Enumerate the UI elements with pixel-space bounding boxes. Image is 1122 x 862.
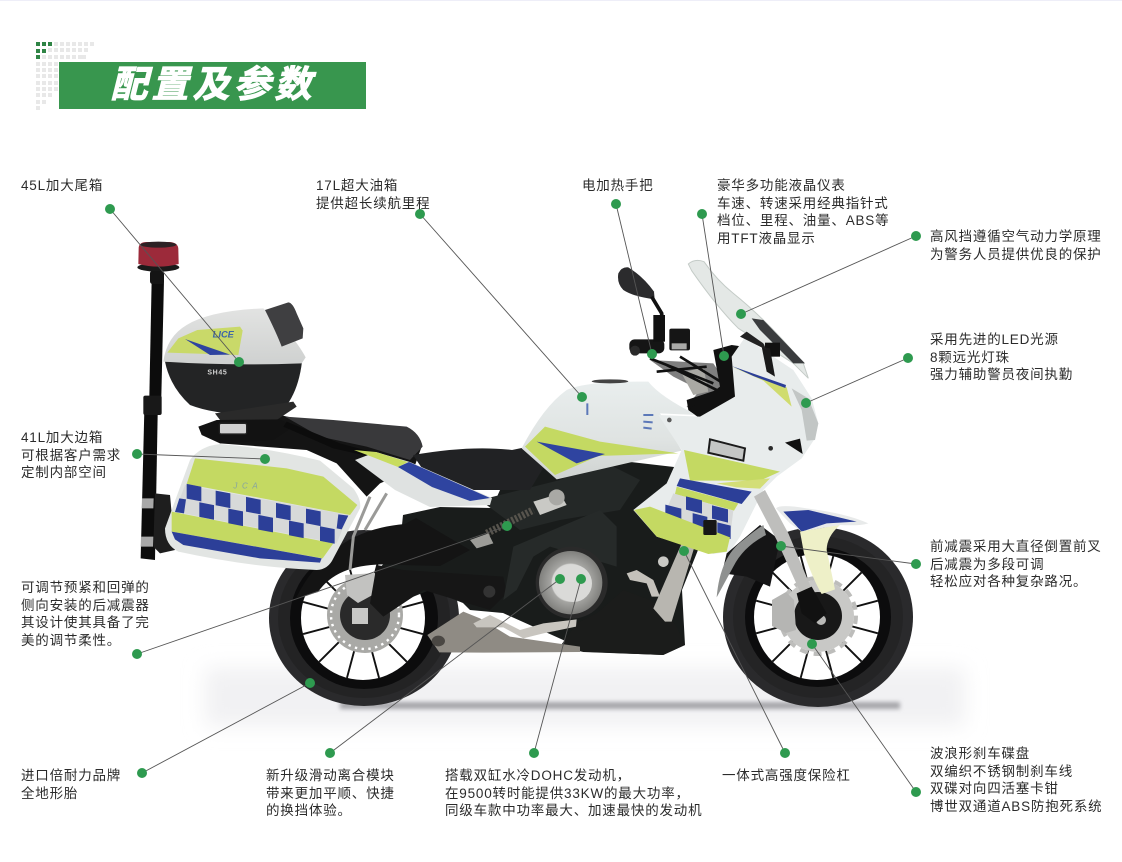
text: LED light: 强力辅助警员夜间执勤: [930, 367, 1073, 382]
rear light bracket: [198, 419, 293, 443]
leader: LED light: [801, 353, 913, 408]
leader: crash bar: [679, 546, 790, 758]
text: slipper clutch: 新升级滑动离合模块: [266, 768, 395, 783]
text: engine: 同级车款中功率最大、加速最快的发动机: [445, 803, 702, 818]
tail unit: [163, 302, 423, 570]
text: slipper clutch: 的换挡体验。: [266, 803, 352, 818]
engine, exhaust and swingarm: [370, 489, 695, 655]
text: windscreen: 高风挡遵循空气动力学原理: [930, 229, 1102, 244]
text: brake system: 波浪形刹车碟盘: [930, 746, 1030, 761]
fairing dark mount: [688, 345, 743, 418]
motorcycle illustration: [137, 242, 913, 707]
red beacon: [137, 242, 179, 284]
text: 45L top box: 45L加大尾箱: [21, 178, 103, 193]
rider seat: [413, 440, 560, 490]
top box: SH45: [207, 370, 227, 377]
text: crash bar: 一体式高强度保险杠: [722, 768, 851, 783]
engine cover: [536, 547, 608, 619]
leader: 41L side case: [132, 449, 270, 464]
leader: rear shock: [132, 521, 512, 659]
text: front fork: 轻松应对各种复杂路况。: [930, 574, 1087, 589]
title banner: [59, 62, 366, 109]
text: 41L side case: 可根据客户需求: [21, 448, 121, 463]
decorative dot pattern: [36, 42, 94, 110]
mirror: [618, 267, 663, 330]
leader: engine: [529, 574, 586, 758]
tank: [522, 382, 697, 479]
text: rear shock: 可调节预紧和回弹的: [21, 580, 150, 595]
leader: slipper clutch: [325, 574, 565, 758]
text: slipper clutch: 带来更加平顺、快捷: [266, 786, 395, 801]
title banner: 配置及参数: [109, 64, 324, 105]
front fork and fender: [703, 490, 868, 623]
exhaust: [427, 612, 580, 653]
text: LED light: 采用先进的LED光源: [930, 332, 1059, 347]
text: brake system: [930, 746, 1102, 814]
front footrest bracket: [627, 570, 660, 597]
leader lines with dots: [105, 199, 921, 797]
text: rear shock: 其设计使其具备了完: [21, 615, 150, 630]
text: 41L side case: 定制内部空间: [21, 465, 107, 480]
leader: heated grips: [611, 199, 657, 359]
text: engine: 在9500转时能提供33KW的最大功率，: [445, 786, 690, 801]
camera mount: [740, 332, 780, 377]
leader: front fork: [776, 541, 921, 569]
text: brake system: 双编织不锈钢制刹车线: [930, 764, 1073, 779]
text: rear shock: [21, 580, 150, 648]
text: tyre: 全地形胎: [21, 786, 78, 801]
text: 41L side case: 41L加大边箱: [21, 430, 103, 445]
text: front fork: [930, 539, 1102, 589]
top box: [163, 302, 306, 420]
leader: 45L top box: [105, 204, 244, 367]
text: 17L tank: [316, 178, 430, 211]
text: heated grips: 电加热手把: [582, 178, 654, 193]
text: engine: [445, 768, 702, 818]
beacon pole: [137, 242, 179, 560]
tail fairing: [354, 450, 492, 507]
text: windscreen: [930, 229, 1102, 262]
ground shadow: [205, 668, 965, 726]
text: 41L side case: [21, 430, 121, 480]
leader: brake disc: [807, 639, 921, 797]
tank and front fairing: [522, 260, 818, 554]
belly pan: [560, 590, 685, 655]
front wheel: [723, 527, 913, 707]
text: front fork: 前减震采用大直径倒置前叉: [930, 539, 1102, 554]
handlebars and cockpit: [629, 315, 735, 418]
text: engine: 搭载双缸水冷DOHC发动机，: [445, 768, 631, 783]
leader: windscreen: [736, 231, 921, 319]
text: LED light: [930, 332, 1073, 382]
text: 17L tank: 17L超大油箱: [316, 178, 398, 193]
text: windscreen: 为警务人员提供优良的保护: [930, 247, 1102, 262]
body dark mass: [378, 450, 702, 655]
text: LED light: 8颗远光灯珠: [930, 350, 1010, 365]
text: slipper clutch: [266, 768, 395, 818]
windscreen: [688, 260, 808, 378]
case rail: [350, 493, 387, 570]
text: brake system: 双碟对向四活塞卡钳: [930, 781, 1059, 796]
text: instrument panel: [717, 178, 889, 246]
text: 17L tank: 提供超长续航里程: [316, 196, 430, 211]
side case: JCA: [232, 481, 262, 490]
text: instrument panel: 档位、里程、油量、ABS等: [717, 213, 889, 228]
text: instrument panel: 用TFT液晶显示: [717, 231, 816, 246]
leader: 17L tank: [415, 209, 587, 402]
text: rear shock: 侧向安装的后减震器: [21, 598, 150, 613]
text: front fork: 后减震为多段可调: [930, 557, 1044, 572]
leader: tyre: [137, 678, 315, 778]
text: instrument panel: 豪华多功能液晶仪表: [717, 178, 846, 193]
side case: [165, 444, 360, 570]
text: tyre: [21, 768, 121, 801]
led light: [708, 439, 745, 461]
shock absorber: [470, 489, 567, 548]
front fairing: [633, 332, 818, 554]
seat: [283, 417, 423, 460]
text: tyre: 进口倍耐力品牌: [21, 768, 121, 783]
rear wheel: [269, 530, 459, 706]
text: brake system: 博世双通道ABS防抱死系统: [930, 799, 1102, 814]
leader: instrument panel: [697, 209, 729, 361]
text: rear shock: 美的调节柔性。: [21, 633, 121, 648]
frame behind seat and case: [213, 415, 422, 497]
top box: LICE: [213, 330, 235, 340]
text: instrument panel: 车速、转速采用经典指针式: [717, 196, 889, 211]
